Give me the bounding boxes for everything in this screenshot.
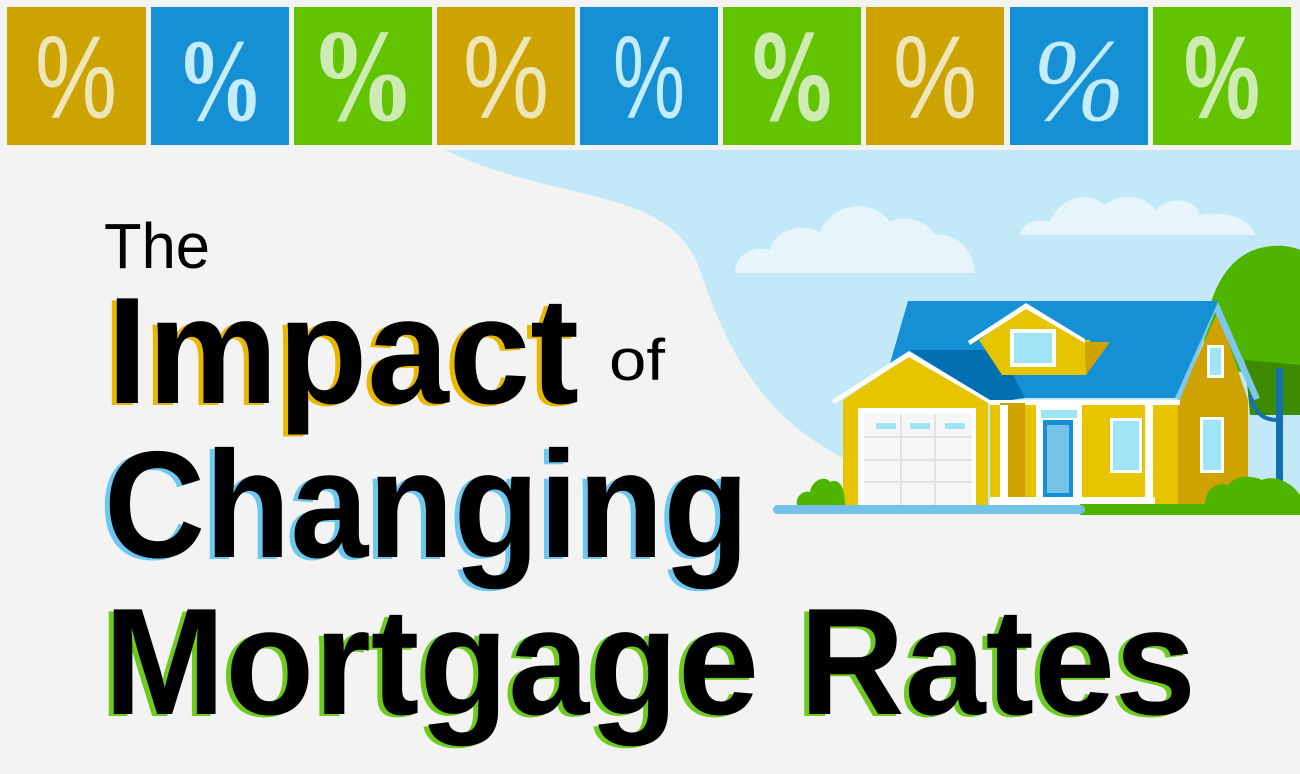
garage door <box>858 408 976 505</box>
title line: Impact: Impact <box>107 266 579 436</box>
percent tiles row: % <box>176 15 264 146</box>
porch columns and door <box>1000 405 1008 500</box>
main roof <box>880 301 1218 398</box>
ground <box>1080 504 1300 515</box>
dark roof <box>910 350 1025 403</box>
title line: Changing: Changing <box>104 420 749 590</box>
title line: The: The <box>104 210 210 282</box>
right wing <box>1178 312 1248 505</box>
main body <box>990 400 1178 505</box>
percent tiles row: % <box>463 12 549 144</box>
bushes <box>797 479 845 505</box>
percent tiles row: % <box>35 12 117 144</box>
title line: of: of <box>609 328 666 393</box>
percent tiles row: % <box>613 12 685 144</box>
cloud right <box>1020 197 1255 235</box>
title <box>99 210 1196 749</box>
percent tiles row: % <box>893 12 977 144</box>
percent tiles row: % <box>752 10 832 148</box>
title line: Changing: Changing <box>99 422 744 592</box>
title line: Mortgage Rates: Mortgage Rates <box>104 577 1196 747</box>
sky background <box>445 150 1300 512</box>
title line: Mortgage Rates: Mortgage Rates <box>99 579 1191 749</box>
cloud left <box>735 206 975 273</box>
title line: Impact: Impact <box>102 268 574 438</box>
percent tiles row: % <box>318 9 408 148</box>
tree <box>1204 246 1300 493</box>
percent tiles row: % <box>1184 12 1260 144</box>
house <box>832 301 1260 505</box>
garage gable <box>843 356 988 505</box>
dormer <box>979 307 1090 375</box>
percent tiles row <box>7 7 1291 148</box>
percent tiles row: % <box>1033 15 1125 146</box>
